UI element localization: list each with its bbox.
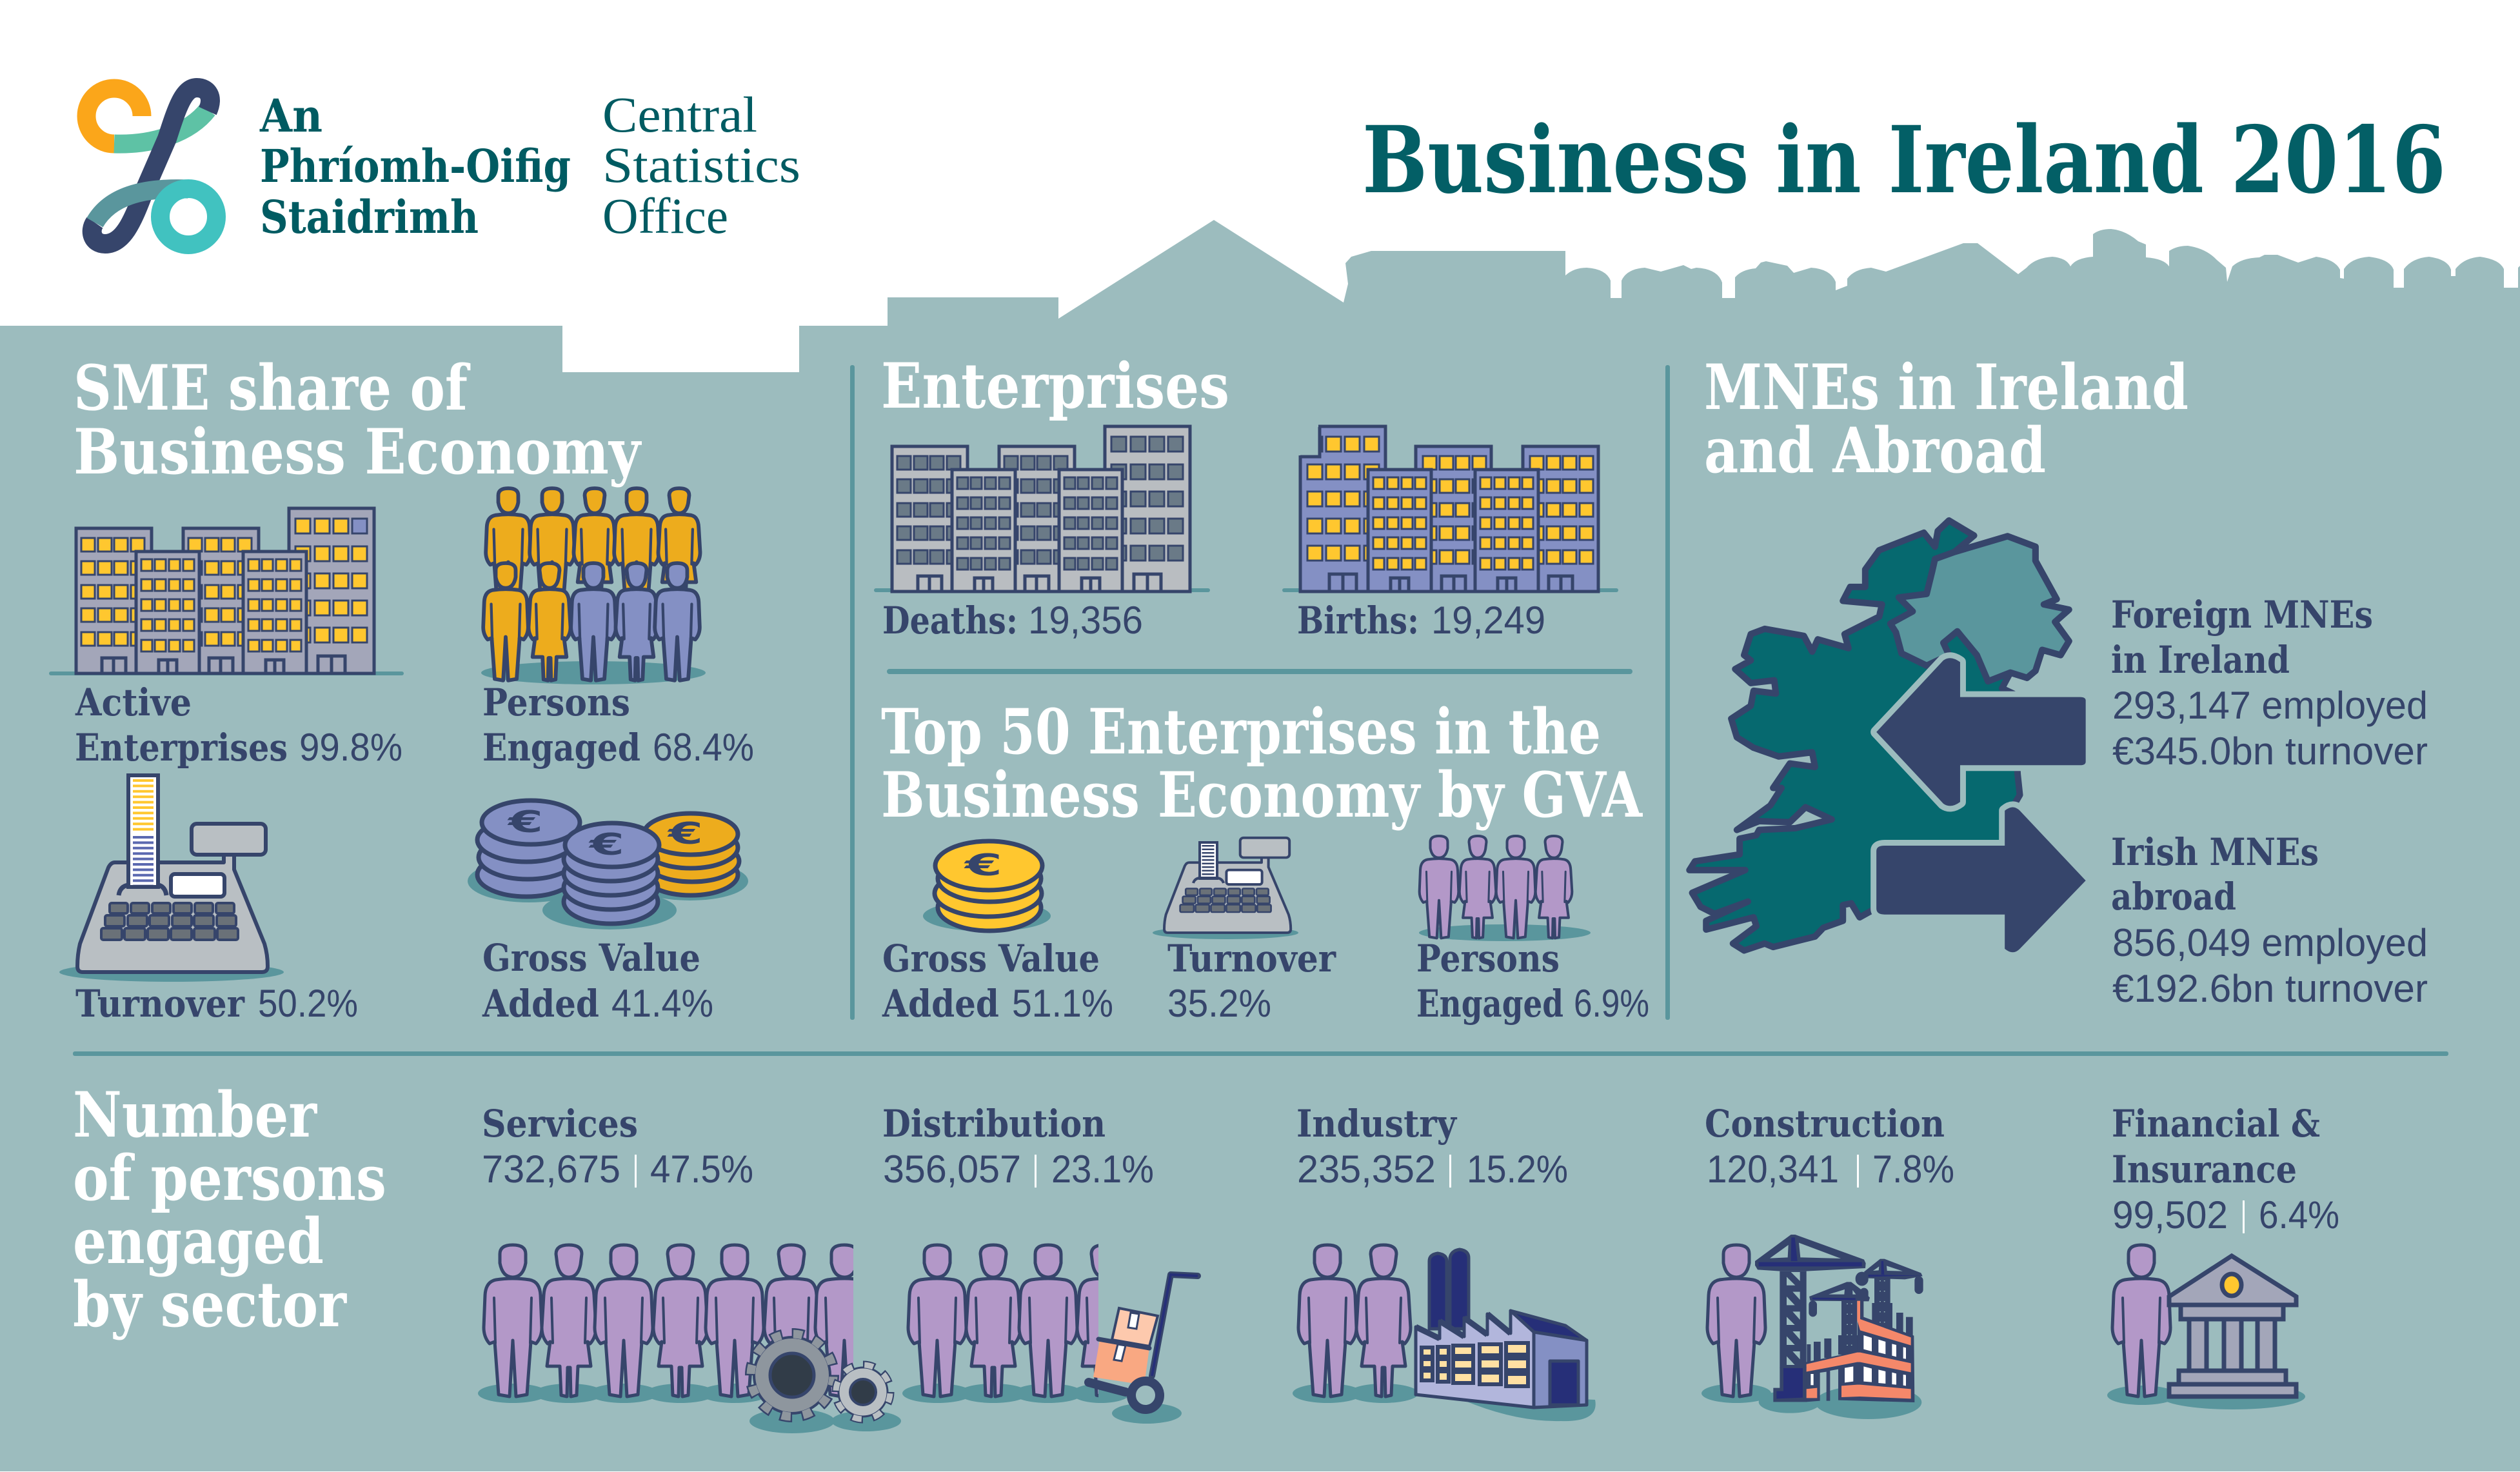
- panel: top 50 enterprises: [881, 695, 1649, 1026]
- top 50 values: Turnover: [1167, 937, 1336, 980]
- top 50 heading: [881, 695, 1643, 831]
- icon: deaths grey buildings: [874, 426, 1210, 592]
- panel: SME share of business economy: [49, 352, 754, 1026]
- logo name Irish: Staidrimh: [260, 190, 479, 244]
- distribution people and hand truck: [902, 1245, 1198, 1424]
- distribution text: 356,057: [883, 1148, 1021, 1191]
- logo name English: [602, 86, 800, 244]
- logo name English: Statistics: [602, 137, 800, 193]
- services people and gears: [478, 1245, 901, 1433]
- industry text: 235,352: [1297, 1148, 1436, 1191]
- deaths and births values: Deaths:: [882, 599, 1018, 642]
- sector: services: [478, 1102, 901, 1433]
- logo name Irish: An: [259, 89, 322, 143]
- MNE statistics: abroad: [2111, 875, 2236, 919]
- deaths and births values: 19,249: [1431, 599, 1545, 642]
- industry text: 15.2%: [1467, 1148, 1568, 1191]
- panel: enterprises: [874, 350, 1618, 642]
- sector heading: [73, 1079, 386, 1341]
- construction text: [1705, 1102, 1954, 1191]
- MNE heading: MNEs in Ireland: [1704, 351, 2188, 424]
- top 50 heading: Top 50 Enterprises in the: [881, 695, 1601, 768]
- financial text: [2112, 1102, 2339, 1237]
- services text: [482, 1102, 753, 1191]
- MNE statistics: Irish MNEs: [2111, 830, 2319, 874]
- SME heading: SME share of: [74, 352, 471, 424]
- icon: four persons: [1419, 836, 1591, 941]
- top 50 values: [882, 937, 1649, 1026]
- MNE heading: [1704, 351, 2188, 487]
- panel: MNEs in Ireland and abroad: [1689, 351, 2428, 1010]
- scaffolding and building frame: [1806, 1300, 1914, 1402]
- construction text: 120,341: [1707, 1148, 1839, 1191]
- deaths and births values: Births:: [1297, 599, 1419, 642]
- SME stats labels: [75, 681, 754, 1026]
- SME stats labels: 99.8%: [299, 726, 402, 769]
- MNE statistics: 856,049 employed: [2112, 921, 2428, 964]
- SME stats labels: 68.4%: [653, 726, 754, 769]
- arrow: Irish MNEs abroad: [1876, 807, 2086, 952]
- industry text: Industry: [1296, 1102, 1458, 1146]
- deaths and births values: 19,356: [1028, 599, 1143, 642]
- SME stats labels: 50.2%: [258, 982, 358, 1025]
- sector heading: engaged: [73, 1205, 324, 1278]
- crane two, back right: [1862, 1259, 1923, 1330]
- MNE statistics: Foreign MNEs: [2111, 593, 2373, 637]
- icon: active enterprises buildings: [49, 508, 404, 675]
- MNE statistics: €345.0bn turnover: [2112, 730, 2428, 773]
- sector: financial and insurance: [2107, 1102, 2339, 1409]
- icon: persons engaged crowd: [481, 488, 706, 684]
- MNE statistics: in Ireland: [2111, 638, 2290, 682]
- building windows: [1811, 1335, 1906, 1386]
- MNE statistics: 293,147 employed: [2112, 684, 2428, 727]
- SME stats labels: Active: [75, 681, 192, 724]
- top 50 values: Engaged: [1416, 982, 1563, 1026]
- SME stats labels: Engaged: [482, 726, 640, 770]
- services text: Services: [482, 1102, 638, 1146]
- SME stats labels: Gross Value: [482, 936, 700, 980]
- icon: gold coins: €: [964, 848, 1002, 882]
- SME heading: [74, 352, 642, 488]
- arrow: foreign MNEs into Ireland: [1876, 658, 2086, 806]
- top 50 values: Persons: [1416, 937, 1560, 980]
- icon: euro coins: €: [507, 804, 543, 839]
- top 50 values: 35.2%: [1167, 982, 1271, 1025]
- construction text: 7.8%: [1872, 1148, 1954, 1191]
- services text: 47.5%: [650, 1148, 753, 1191]
- distribution text: [882, 1102, 1154, 1191]
- sector: distribution: [882, 1102, 1198, 1424]
- SME heading: Business Economy: [74, 415, 642, 488]
- icon: small cash register: [1153, 838, 1298, 939]
- SME stats labels: Added: [482, 982, 599, 1026]
- SME stats labels: Enterprises: [75, 726, 288, 770]
- logo name English: Office: [602, 188, 728, 244]
- sector heading: Number: [73, 1079, 317, 1151]
- sector: industry: [1293, 1102, 1596, 1421]
- top 50 values: 6.9%: [1574, 982, 1649, 1025]
- financial text: 99,502: [2112, 1193, 2228, 1237]
- panel: number of persons engaged by sector: [73, 1079, 2339, 1433]
- logo name Irish: Phríomh-Oifig: [260, 139, 571, 193]
- MNE heading: and Abroad: [1704, 414, 2046, 487]
- top 50 values: Added: [882, 982, 999, 1026]
- financial person and bank: [2107, 1245, 2305, 1409]
- icon: euro coins: [468, 801, 748, 930]
- sector: construction: [1701, 1102, 1954, 1419]
- top 50 heading: Business Economy by GVA: [881, 759, 1643, 831]
- crane one, front: [1755, 1235, 1866, 1402]
- enterprises heading: Enterprises: [881, 350, 1229, 423]
- top 50 values: 51.1%: [1012, 982, 1113, 1025]
- sector heading: by sector: [73, 1268, 347, 1341]
- icon: births blue buildings: [1282, 424, 1618, 592]
- sector heading: of persons: [73, 1142, 386, 1215]
- MNE statistics: [2111, 593, 2428, 1010]
- top 50 values: Gross Value: [882, 937, 1100, 980]
- dividers: [73, 365, 2448, 1056]
- financial text: Insurance: [2112, 1148, 2297, 1191]
- building orange bands: [1806, 1301, 1911, 1398]
- construction person, cranes and building: [1701, 1235, 1923, 1419]
- map of Ireland with arrows: [1689, 521, 2086, 952]
- icon: euro coins: €: [667, 816, 703, 851]
- industry text: [1296, 1102, 1568, 1191]
- construction text: Construction: [1705, 1102, 1945, 1146]
- SME stats labels: Persons: [482, 681, 630, 724]
- distribution text: Distribution: [882, 1102, 1106, 1146]
- logo name English: Central: [602, 86, 757, 143]
- logo name Irish: [259, 89, 571, 244]
- icon: cash register: [59, 775, 284, 982]
- industry people and factory: [1293, 1245, 1596, 1421]
- deaths and births values: [882, 599, 1545, 642]
- services text: 732,675: [482, 1148, 620, 1191]
- financial text: 6.4%: [2259, 1193, 2339, 1237]
- logo mark: [86, 88, 217, 245]
- distribution text: 23.1%: [1051, 1148, 1154, 1191]
- SME stats labels: 41.4%: [611, 982, 713, 1025]
- financial text: Financial &: [2112, 1102, 2320, 1146]
- logo: [86, 86, 800, 245]
- MNE statistics: €192.6bn turnover: [2112, 967, 2428, 1010]
- crane three, back left: [1809, 1282, 1870, 1355]
- SME stats labels: Turnover: [75, 982, 245, 1026]
- icon: euro coins: €: [588, 827, 624, 862]
- icon: gold coins: [923, 841, 1051, 931]
